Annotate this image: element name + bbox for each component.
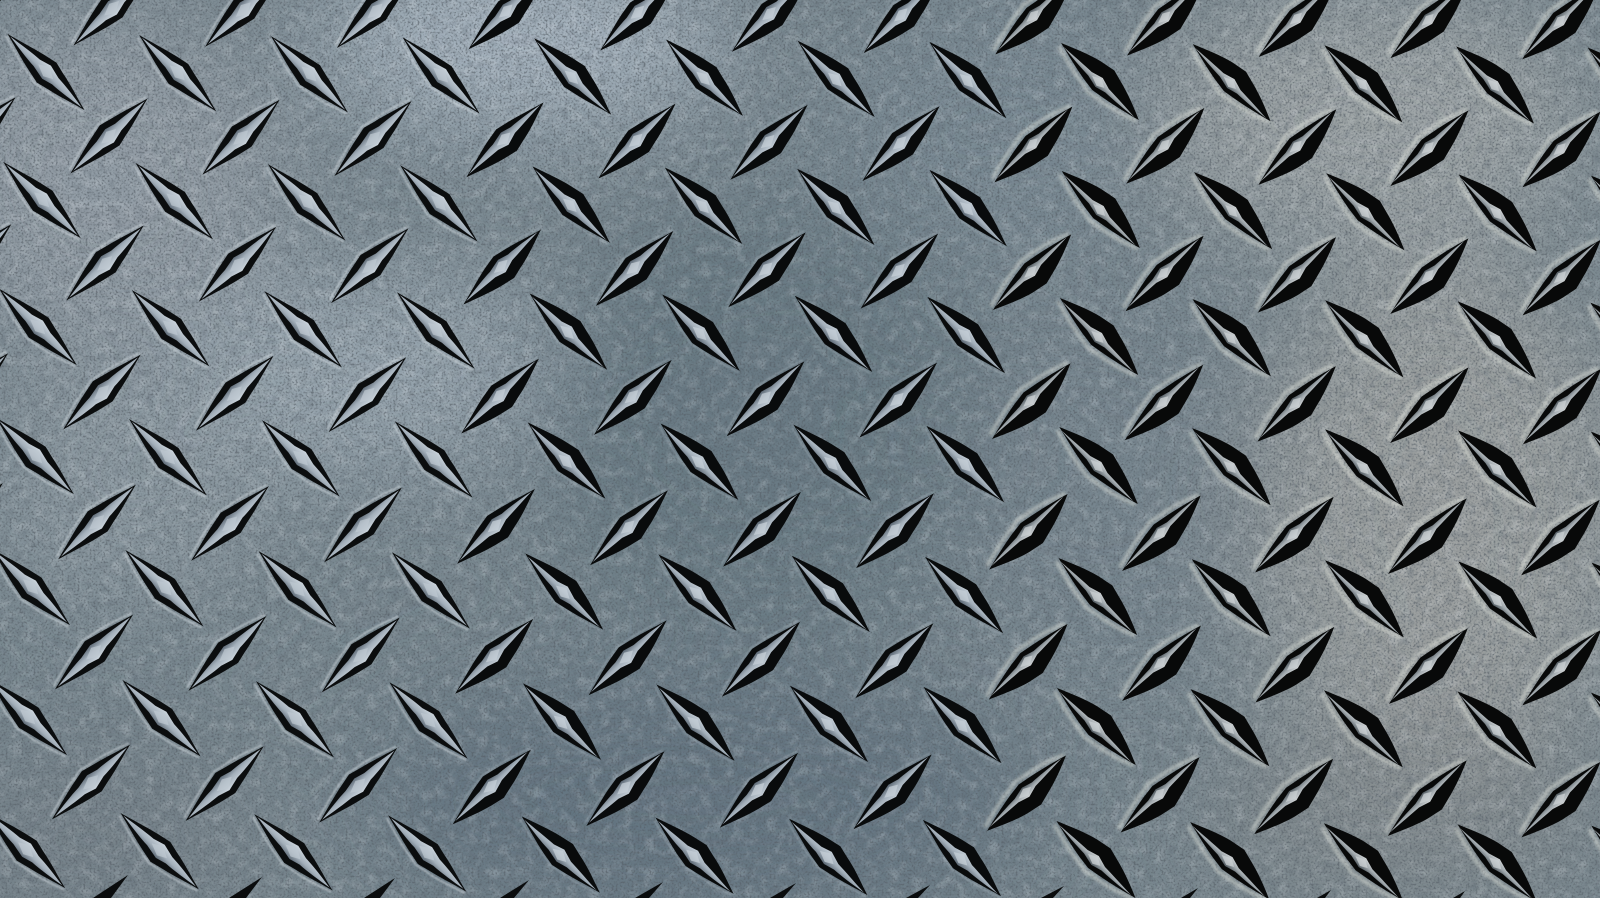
tread row: upward diagonals 4 [0,340,1600,458]
tread row: downward diagonals 1 [0,21,1600,136]
tread row: upward diagonals 6 [0,600,1600,719]
tread row: downward diagonals 3 [0,276,1600,391]
tread row: upward diagonals 5 [0,470,1600,589]
tread row: downward diagonals 5 [0,536,1600,651]
tread row: downward diagonals 4 [0,405,1600,520]
tread row: upward diagonals 3 [0,211,1600,329]
tread row: downward diagonals 7 [0,799,1600,898]
tread row: tips of upward diagonals cut by bottom edge [93,875,1465,898]
tread row: downward diagonals 2 [0,149,1600,264]
tread row: upward diagonals 1 [0,0,1600,73]
tread row: upward diagonals 2 [0,84,1600,201]
tread row: downward diagonals 6 [0,666,1600,781]
tread row: upward diagonals 7 [0,730,1600,851]
